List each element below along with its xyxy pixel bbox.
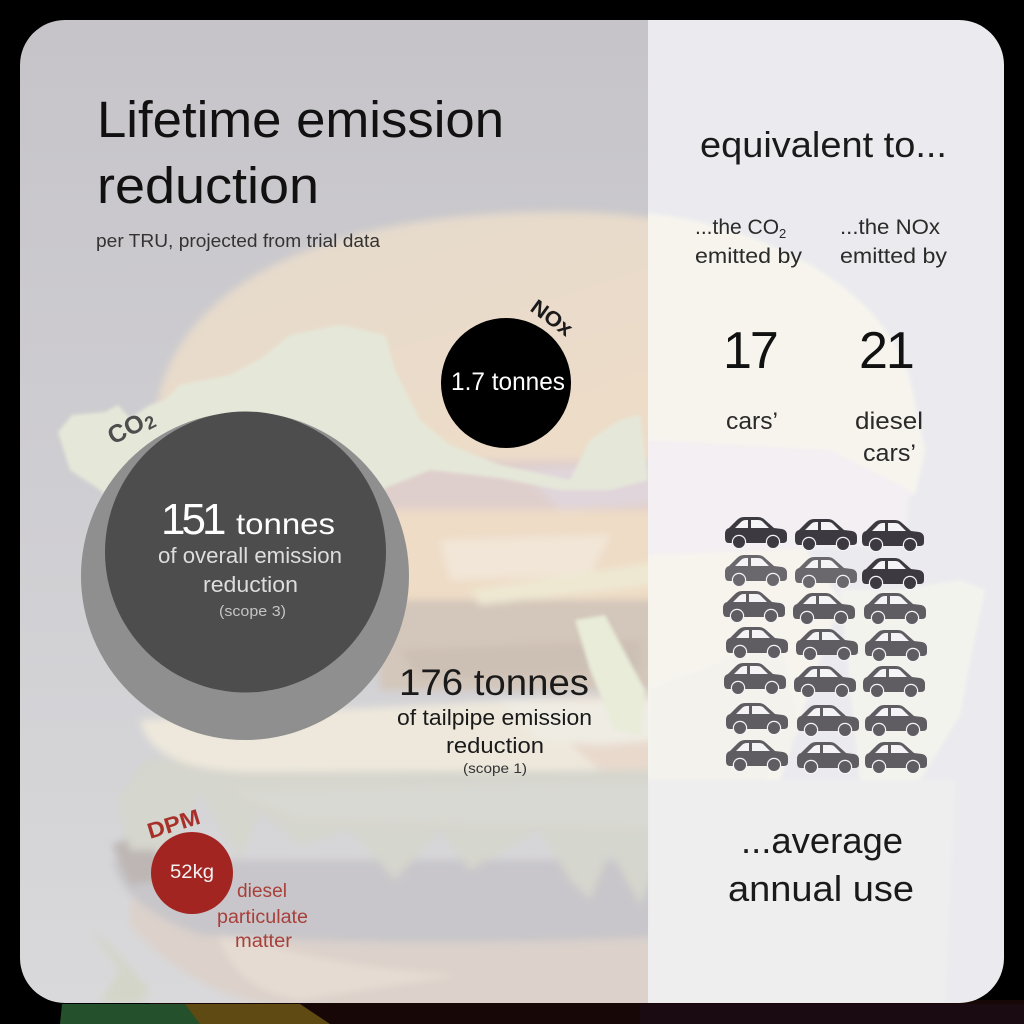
- column: NOx equivalent: ...the NOx: [840, 216, 941, 239]
- circle: CO2: of overall emission: [158, 543, 342, 568]
- column: NOx equivalent: [840, 216, 948, 467]
- subtitle: per TRU, projected from trial data: [96, 231, 381, 251]
- column: CO2 equivalent: emitted by: [695, 245, 803, 268]
- heading: equivalent to: equivalent to...: [700, 124, 947, 165]
- circle: NOx: 1.7 tonnes: [451, 368, 565, 396]
- circle: CO2: 151: [161, 495, 225, 544]
- text: tailpipe reduction: reduction: [446, 733, 544, 758]
- text: average annual use: ...average: [741, 820, 903, 861]
- panel: right: [620, 20, 1004, 1003]
- title: Lifetime emission: [97, 91, 504, 148]
- circle: CO2: (scope 3): [219, 603, 286, 620]
- circle: DPM: 52kg: [170, 862, 214, 883]
- circle: DPM: particulate: [217, 907, 308, 928]
- icons: car grid: [723, 517, 927, 774]
- circle: DPM: diesel: [237, 881, 287, 902]
- circle: CO2: reduction: [203, 572, 298, 597]
- text: tailpipe reduction: of tailpipe emission: [397, 705, 592, 730]
- burger layers: left: [58, 210, 648, 1003]
- column: NOx equivalent: cars’: [863, 440, 916, 467]
- circle: NOx: NOx: [526, 295, 577, 341]
- circle: DPM: DPM: [144, 804, 203, 844]
- burger layers: right: [648, 214, 924, 780]
- circle: CO2: tonnes: [236, 508, 335, 541]
- circle: CO2: 2: [141, 411, 159, 434]
- title: reduction: [97, 157, 319, 214]
- circle: DPM: matter: [235, 931, 293, 952]
- text: average annual use: annual use: [728, 868, 914, 909]
- panel: left: [20, 20, 648, 1003]
- circle: DPM: [144, 804, 308, 952]
- text: tailpipe reduction: (scope 1): [463, 760, 527, 776]
- column: CO2 equivalent: 17: [723, 322, 777, 380]
- column: NOx equivalent: 21: [859, 322, 913, 380]
- circle: CO2: CO: [103, 408, 149, 450]
- column: CO2 equivalent: cars’: [726, 408, 778, 435]
- column: CO2 equivalent: [695, 216, 803, 435]
- title: [97, 91, 504, 214]
- column: CO2 equivalent: ...the CO: [695, 216, 779, 239]
- column: CO2 equivalent: 2: [779, 226, 786, 241]
- text: tailpipe reduction: [397, 662, 592, 776]
- text: average annual use: [728, 820, 914, 909]
- circle: NOx: [441, 295, 577, 448]
- column: NOx equivalent: emitted by: [840, 245, 948, 268]
- text: tailpipe reduction: 176 tonnes: [399, 662, 589, 703]
- circle: CO2: [81, 403, 409, 740]
- bottom strip of burger photo: [60, 1000, 1024, 1024]
- column: NOx equivalent: diesel: [855, 408, 923, 435]
